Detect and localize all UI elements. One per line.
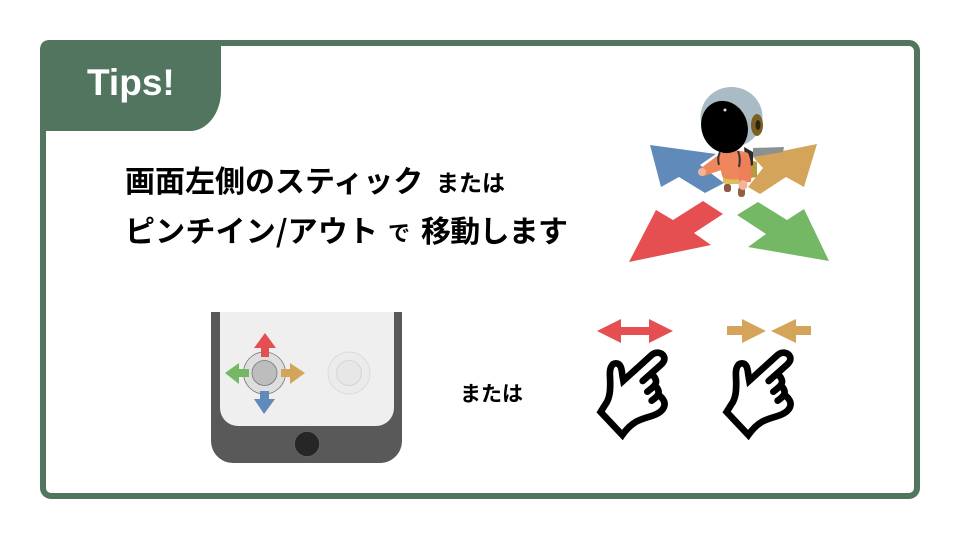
arrow: orange right — [281, 363, 305, 384]
arrow: blue down — [254, 391, 275, 414]
text block: instructions: 画面左側のスティック — [125, 166, 423, 199]
arrow: red double — [597, 319, 673, 343]
text block: instructions: 移動します — [421, 216, 568, 249]
pinch-out gesture — [597, 319, 673, 435]
text block: instructions: で — [388, 221, 410, 246]
arrow: blue up-left — [650, 145, 724, 193]
joystick: movement — [244, 352, 286, 394]
arrow: red up — [254, 333, 276, 357]
arrow: orange left-hand inward — [727, 319, 766, 343]
arrow: orange right-hand inward — [771, 319, 811, 343]
label: または: または — [460, 383, 523, 406]
phone screen — [220, 312, 394, 426]
illustration: character with four direction arrows — [629, 87, 829, 262]
icon: hand — [727, 353, 791, 435]
joystick: right — [328, 352, 370, 394]
arrow: green left — [225, 363, 249, 384]
text block: instructions: または — [436, 170, 505, 196]
home button — [294, 432, 320, 456]
phone body — [211, 312, 402, 463]
panel: tips frame — [43, 43, 917, 496]
arrow: green down-right — [737, 202, 829, 261]
icon: hand — [601, 353, 665, 435]
text block: instructions — [125, 166, 568, 251]
text block: instructions: ピンチイン/アウト — [125, 207, 378, 251]
phone illustration — [211, 312, 402, 463]
pinch-in gesture — [727, 319, 811, 435]
heading tab: Tips! — [40, 40, 221, 131]
arrow: orange up-right — [748, 144, 817, 194]
character: astronaut — [694, 87, 784, 197]
arrow: red down-left — [629, 201, 723, 262]
heading tab: Tips!: Tips! — [87, 62, 175, 103]
